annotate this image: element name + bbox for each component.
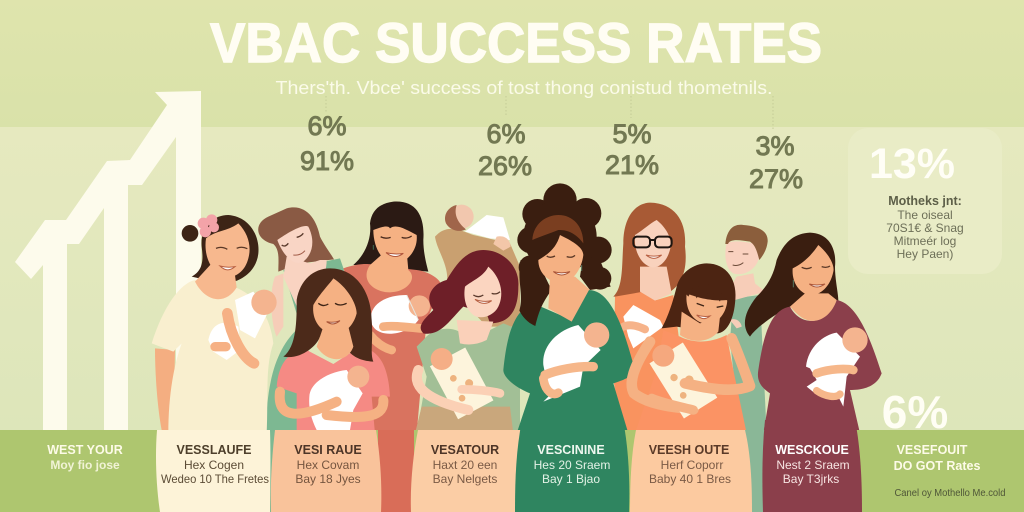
mother: maroon dress bbox=[745, 233, 882, 433]
flower bbox=[198, 214, 219, 237]
percentage labels: 91% bbox=[300, 146, 354, 176]
panel: 13% callout: Hey Paen) bbox=[897, 247, 953, 261]
label: column 5: VESCININE bbox=[537, 443, 605, 457]
group of mothers left side bbox=[152, 202, 520, 433]
percentage labels: 21% bbox=[605, 150, 659, 180]
mother: brown hair back row bbox=[258, 207, 344, 433]
label: column 6: VEESH OUTE bbox=[649, 443, 729, 457]
mother: pink top bbox=[277, 268, 390, 433]
label: column 3: Bay 18 Jyes bbox=[295, 472, 361, 486]
panel: 13% callout bbox=[848, 128, 1002, 274]
percentage labels: 6% bbox=[307, 111, 347, 141]
label: column 7: WESCKOUE bbox=[775, 443, 849, 457]
percentage labels: 3% bbox=[755, 131, 795, 161]
label: column 8: DO GOT Rates bbox=[894, 459, 980, 473]
man in back row bbox=[725, 225, 768, 433]
title: VBAC SUCCESS RATES bbox=[210, 11, 822, 74]
mother: cream dress bbox=[152, 214, 277, 433]
big 6% figure: 6% bbox=[882, 386, 948, 438]
label: column 3: Hex Covam bbox=[297, 458, 359, 472]
source note: Canel oy Mothello Me.cold bbox=[894, 488, 1006, 499]
label: column 7 bbox=[775, 443, 850, 486]
percentage labels: 26% bbox=[478, 151, 532, 181]
label: column 6: Herf Coporr bbox=[661, 458, 723, 472]
label: column 5: Hes 20 Sraem bbox=[534, 458, 610, 472]
mother: sage top wine hair bbox=[415, 250, 520, 433]
percentage labels bbox=[300, 96, 803, 194]
label: column 1: WEST YOUR bbox=[47, 443, 123, 457]
panel: 13% callout: Mitmeér log bbox=[894, 234, 956, 248]
label: column 1 bbox=[47, 443, 123, 472]
label: column 7: Bay T3jrks bbox=[783, 472, 839, 486]
label: column 8 bbox=[894, 443, 980, 473]
label: column 6: Baby 40 1 Bres bbox=[649, 472, 731, 486]
icon: rising arrow bbox=[15, 91, 201, 430]
panel: 13% callout: 70S1€ & Snag bbox=[886, 221, 964, 235]
label: column 2: Wedeo 10 The Fretes bbox=[161, 472, 269, 486]
label: column 2: Hex Cogen bbox=[184, 458, 244, 472]
label: column 6 bbox=[649, 443, 731, 486]
label: column 3 bbox=[294, 443, 362, 486]
panel: 13% callout: 13% bbox=[869, 140, 955, 188]
label: column 4: Bay Nelgets bbox=[433, 472, 497, 486]
percentage labels: 6% bbox=[486, 119, 526, 149]
mother: auburn hair with glasses bbox=[613, 203, 686, 433]
label: column 4 bbox=[431, 443, 499, 486]
mother: coral dress bbox=[632, 263, 750, 433]
label: column 5: Bay 1 Bjao bbox=[542, 472, 600, 486]
percentage labels: 27% bbox=[749, 164, 803, 194]
column labels bbox=[47, 443, 980, 486]
group of mothers right side bbox=[503, 183, 882, 433]
label: column 2 bbox=[161, 443, 269, 486]
percentage labels: 5% bbox=[612, 119, 652, 149]
mother: black hair terracotta dress bbox=[343, 202, 442, 433]
label: column 4: Haxt 20 een bbox=[433, 458, 497, 472]
label: column 7: Nest 2 Sraem bbox=[776, 458, 850, 472]
panel: 13% callout: Motheks jnt: bbox=[888, 194, 962, 208]
bottom band bbox=[0, 420, 1024, 512]
subtitle: Thers'th. Vbce' success of tost thong conistud thometnils. bbox=[276, 78, 772, 98]
label: column 2: VESSLAUFE bbox=[176, 443, 252, 457]
label: column 8: VESEFOUIT bbox=[897, 443, 968, 457]
mother: green dress curly hair bbox=[503, 183, 634, 433]
label: column 5 bbox=[534, 443, 610, 486]
label: column 4: VESATOUR bbox=[431, 443, 499, 457]
man holding baby up bbox=[435, 205, 520, 327]
panel: 13% callout: The oiseal bbox=[897, 208, 953, 222]
label: column 3: VESI RAUE bbox=[294, 443, 362, 457]
label: column 1: Moy fio jose bbox=[50, 458, 120, 472]
